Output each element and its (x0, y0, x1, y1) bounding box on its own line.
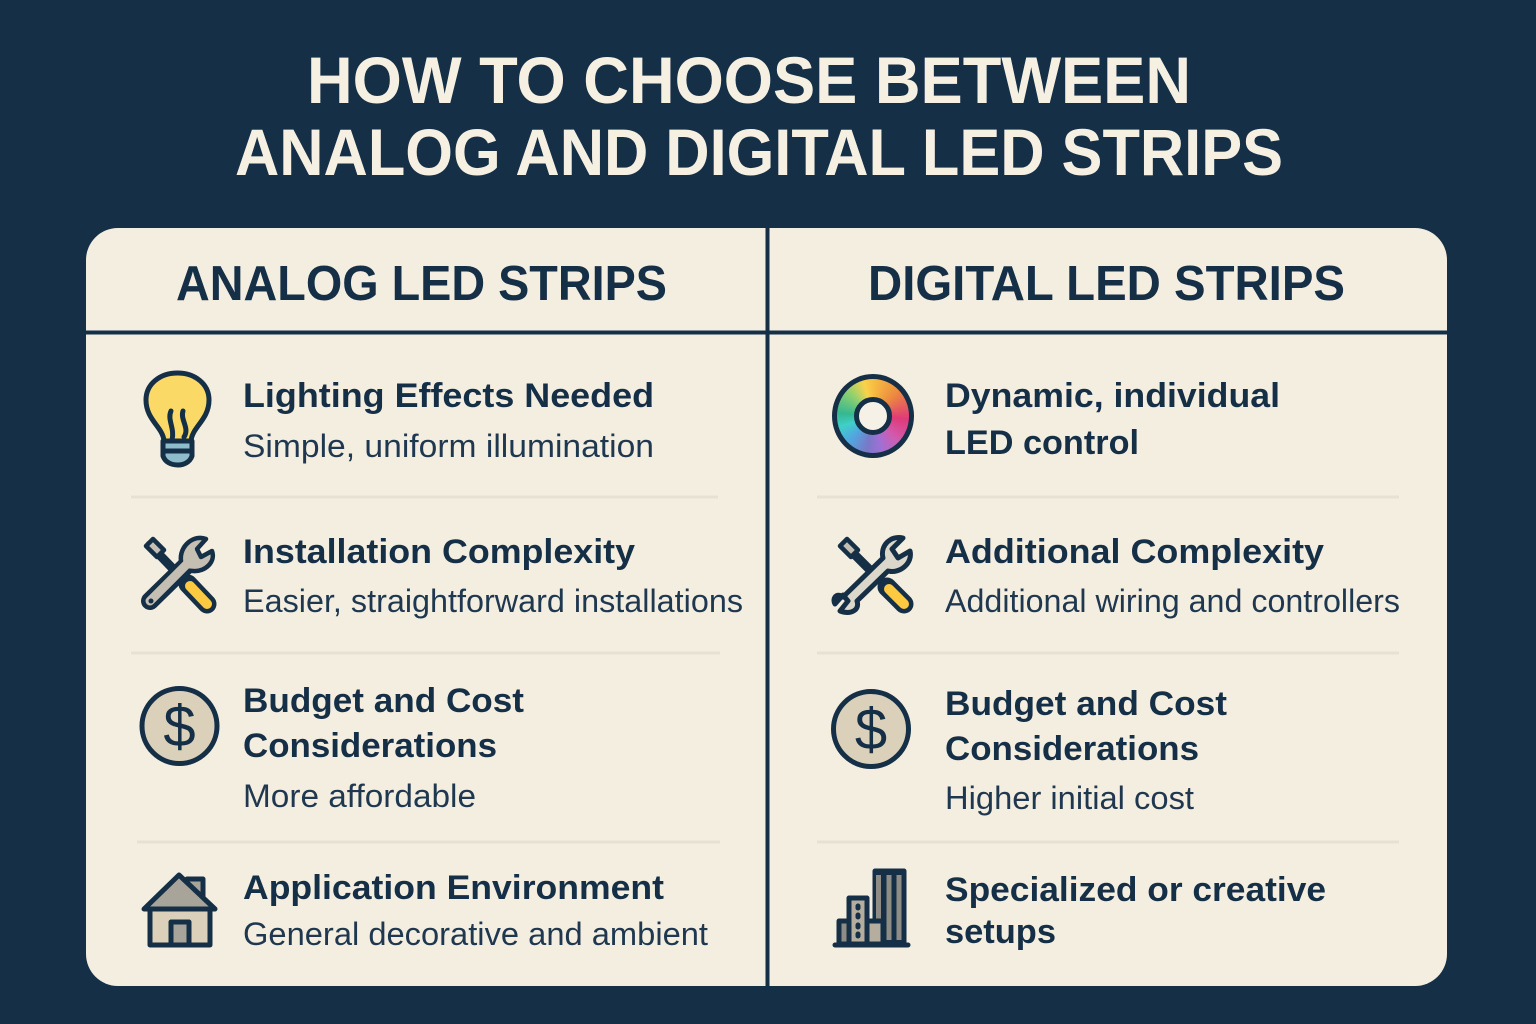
row: budget (945, 685, 1227, 816)
row: budget: Considerations (945, 730, 1199, 768)
row: lighting effects: Lighting Effects Needed (243, 377, 654, 415)
row: specialized: setups (945, 913, 1056, 951)
row: budget (243, 682, 524, 814)
row: dynamic control: LED control (945, 424, 1139, 462)
heading: digital: DIGITAL LED STRIPS (868, 257, 1345, 311)
icon: colour wheel (832, 374, 914, 458)
row: specialized: Specialized or creative (945, 871, 1326, 909)
row: additional complexity: Additional Complexity (945, 533, 1324, 571)
row: dynamic control (945, 377, 1280, 462)
panel: digital column (834, 257, 1400, 951)
row: budget: More affordable (243, 778, 476, 814)
title: HOW TO CHOOSE BETWEEN (307, 43, 1191, 117)
row: additional complexity: Additional wiring and controllers (945, 583, 1400, 619)
icon: tools (146, 538, 213, 604)
icon: dollar coin (142, 688, 217, 764)
title (235, 43, 1283, 189)
row: installation: Installation Complexity (243, 533, 635, 571)
row: budget: Budget and Cost (243, 682, 524, 720)
row: specialized (945, 871, 1326, 951)
icon: house (144, 875, 215, 945)
row: dynamic control: Dynamic, individual (945, 377, 1280, 415)
row: application: General decorative and ambient (243, 916, 708, 952)
row: budget: Budget and Cost (945, 685, 1227, 723)
row: application (243, 869, 708, 952)
icon: light bulb (146, 373, 209, 465)
row: budget: Higher initial cost (945, 780, 1194, 816)
row: installation: Easier, straightforward installations (243, 583, 743, 619)
row: application: Application Environment (243, 869, 664, 907)
row: additional complexity (945, 533, 1400, 619)
icon: city buildings (835, 871, 908, 945)
heading: analog: ANALOG LED STRIPS (176, 257, 667, 311)
icon: dollar coin (834, 692, 908, 766)
icon: tools (834, 538, 910, 612)
row: budget: Considerations (243, 727, 497, 765)
title: ANALOG AND DIGITAL LED STRIPS (235, 115, 1283, 189)
row: installation (243, 533, 743, 619)
row: lighting effects (243, 377, 654, 464)
icon: dollar coin: $ (855, 697, 887, 762)
row: lighting effects: Simple, uniform illumination (243, 428, 654, 464)
icon: dollar coin: $ (163, 694, 196, 759)
panel: analog column (142, 257, 743, 952)
panel: comparison table (86, 228, 1447, 986)
